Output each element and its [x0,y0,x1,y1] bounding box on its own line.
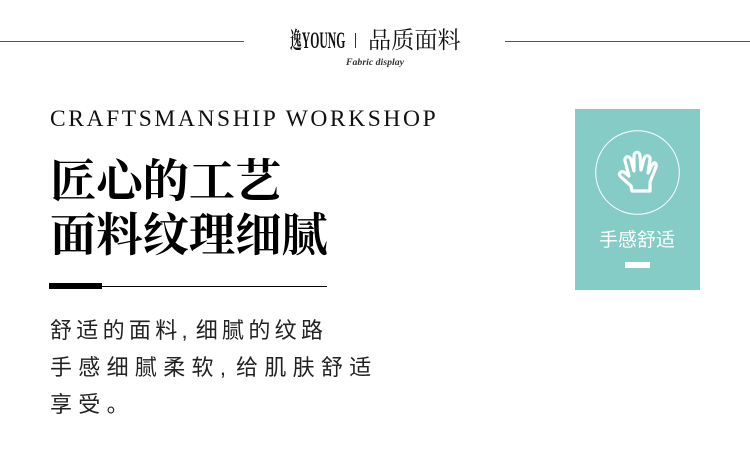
body text: 舒适的面料, 细腻的纹路 [50,318,327,343]
title underline [49,283,327,289]
english heading: CRAFTSMANSHIP WORKSHOP [50,106,438,132]
header brand logo: 逸YOUNG [290,28,345,53]
panel: hand feel comfort [575,109,700,290]
body text: 享受。 [50,392,135,417]
body text: 手感细腻柔软, 给肌肤舒适 [50,355,378,380]
panel dash [625,262,650,268]
main title [50,157,328,262]
body text [50,318,378,417]
panel label: 手感舒适 [599,230,675,251]
header subtitle: Fabric display [346,57,404,68]
header title: 品质面料 [368,28,461,54]
main title: 匠心的工艺 [50,157,281,208]
main title: 面料纹理细腻 [50,211,328,262]
icon: hand in circle [595,130,680,215]
